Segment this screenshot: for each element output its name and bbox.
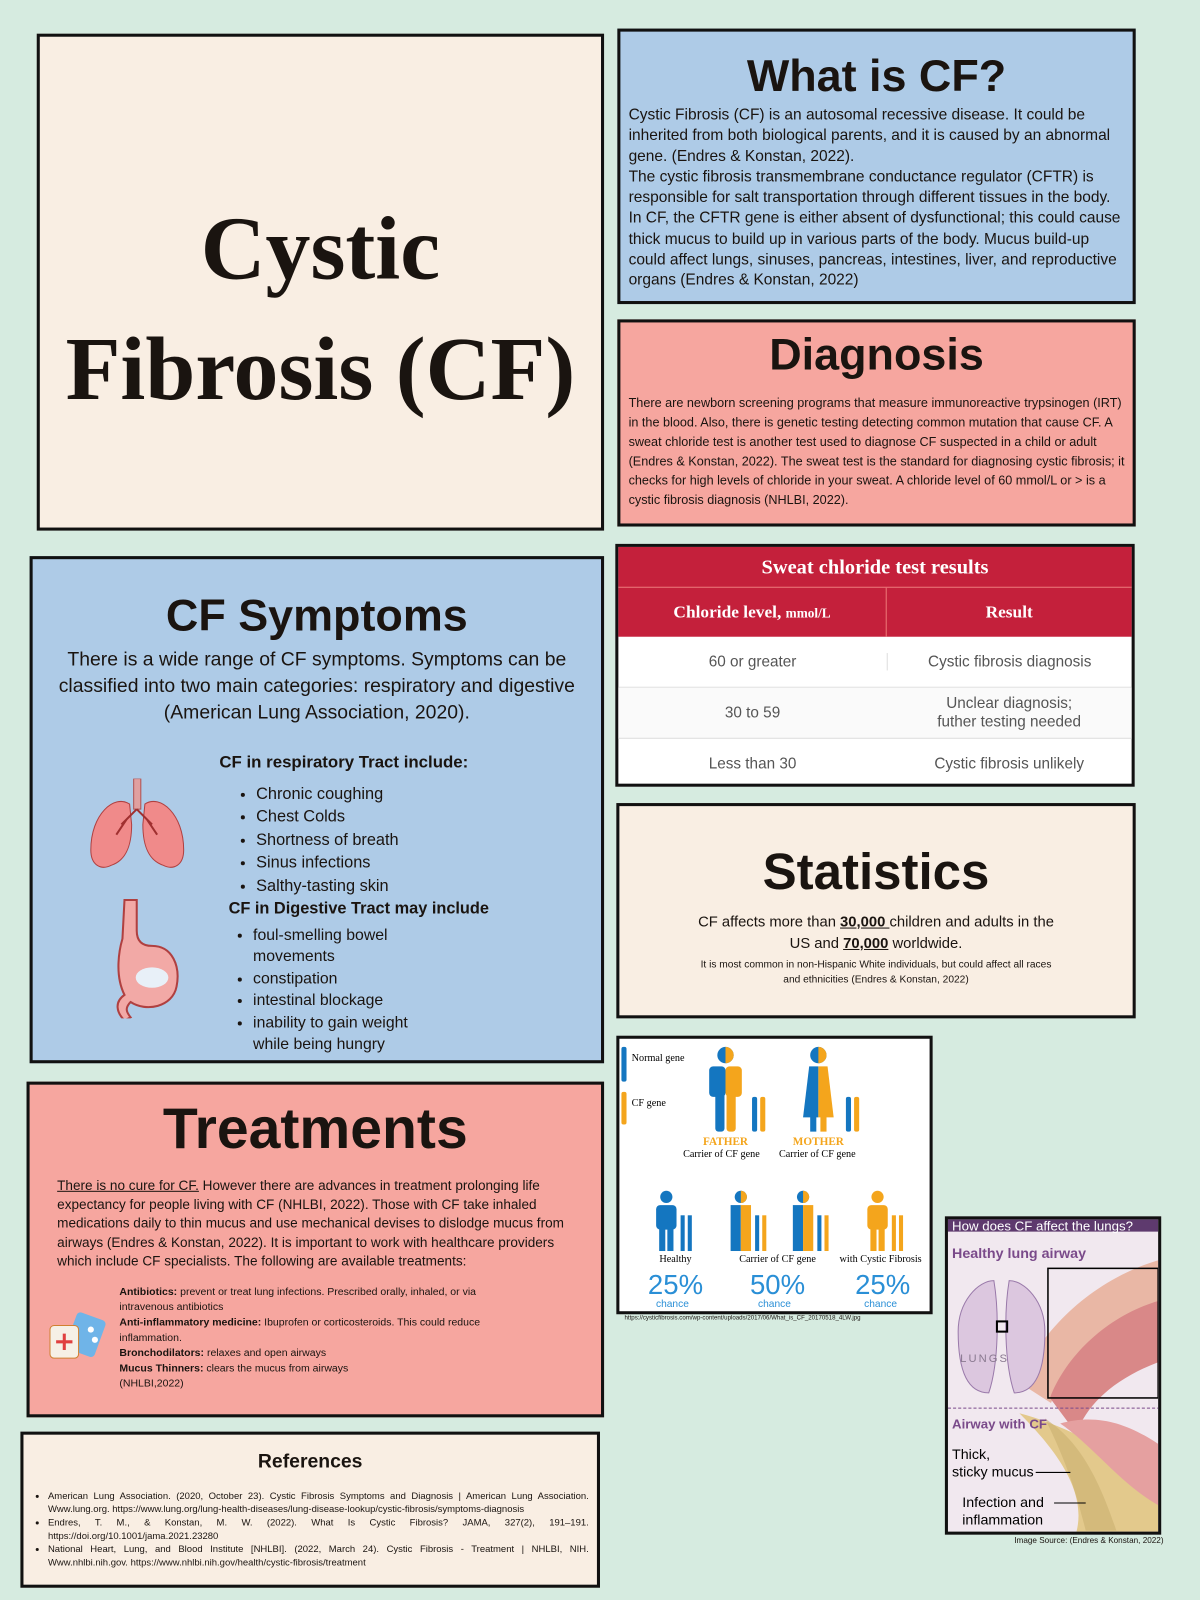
father [709, 1047, 765, 1132]
panel: diagnosis [617, 319, 1136, 527]
table rows: Unclear diagnosis; [946, 694, 1072, 712]
image: lungs airway: LUNGS [960, 1353, 1009, 1365]
list: treatment types [119, 1287, 480, 1390]
chart: genetics inheritance [616, 1036, 933, 1314]
text: definition [628, 106, 1120, 289]
title: Fibrosis (CF) [66, 320, 575, 419]
list: treatment types: Bronchodilators: relaxes and open airways [119, 1348, 326, 1359]
table rows [618, 653, 1132, 772]
table header [618, 588, 1132, 637]
heading: What is CF: What is CF? [747, 51, 1006, 101]
heading: References: References [258, 1451, 362, 1472]
image: lungs airway: Thick, [952, 1447, 990, 1463]
text: statistics [698, 914, 1054, 952]
list: respiratory: Shortness of breath [256, 831, 399, 848]
image: lungs airway: sticky mucus [952, 1465, 1034, 1481]
chart: genetics inheritance: FATHER [703, 1136, 749, 1148]
chart: genetics inheritance: Carrier of CF gene [739, 1254, 816, 1265]
image: lungs airway: Healthy lung airway [952, 1246, 1086, 1262]
chart: genetics inheritance: chance [864, 1299, 897, 1310]
chart: genetics inheritance: Normal gene [632, 1053, 685, 1064]
list: respiratory: Chronic coughing [256, 785, 383, 803]
list: digestive: constipation [253, 970, 337, 987]
list: references [36, 1491, 589, 1568]
list: references: American Lung Association. (2020, October 23). Cystic Fibrosis Symptoms and Diagnosis | American Lung Association. Www.lung.org. https://www.lung.org/lung-health-diseases/lung-disease-lookup/cystic-fibrosis/symptoms-diagnosis [48, 1491, 589, 1514]
caption: genetics source: https://cysticfibrosis.com/wp-content/uploads/2017/06/What_is_CF_20170518_4LW.jpg [624, 1315, 861, 1321]
heading: Statistics: Statistics [763, 843, 989, 900]
list: treatment types: Mucus Thinners: clears the mucus from airways [119, 1363, 348, 1374]
table rows: Less than 30 [709, 755, 796, 772]
chart: genetics inheritance: Carrier of CF gene [779, 1149, 856, 1160]
list: digestive: CF in Digestive Tract may include [229, 900, 489, 917]
list: digestive [229, 900, 489, 1053]
chart: genetics inheritance: 25% [648, 1269, 703, 1300]
image: lungs airway [945, 1216, 1161, 1535]
text: definition: The cystic fibrosis transmembrane conductance regulator (CFTR) is responsible for salt transportation through different tissues in the body. In CF, the CFTR gene is either absent of dysfunctional; this could cause thick mucus to build up in various parts of the body. Mucus build-up could affect lungs, sinuses, pancreas, intestines, liver, and reproductive organs (Endres & Konstan, 2022) [629, 168, 1120, 289]
list: digestive: inability to gain weight [253, 1014, 408, 1031]
panel: references [20, 1432, 600, 1588]
image: lungs airway: inflammation [962, 1512, 1043, 1528]
chart: genetics inheritance: CF gene [632, 1098, 666, 1109]
list: references: Endres, T. M., & Konstan, M. W. (2022). What Is Cystic Fibrosis? JAMA, 327(2), 191–191. https://doi.org/10.1001/jama.2021.23280 [48, 1517, 589, 1541]
title [66, 200, 575, 419]
chart: genetics inheritance: MOTHER [793, 1136, 845, 1148]
table rows: Cystic fibrosis unlikely [934, 755, 1084, 772]
text: statistics: US and 70,000 worldwide. [790, 936, 962, 952]
title: Cystic [201, 200, 440, 299]
text: definition: Cystic Fibrosis (CF) is an autosomal recessive disease. It could be inherited from both biological parents, and it is caused by an abnormal gene. (Endres & Konstan, 2022). [629, 106, 1110, 165]
chart: genetics inheritance: Carrier of CF gene [683, 1149, 760, 1160]
image: lungs airway: Infection and [962, 1495, 1044, 1511]
panel: what is CF [617, 29, 1136, 304]
heading: Treatments: Treatments [163, 1096, 468, 1160]
table header: Result [986, 602, 1033, 621]
list: respiratory: CF in respiratory Tract include: [219, 753, 468, 771]
icon: medicine [50, 1312, 106, 1359]
mother [803, 1047, 859, 1132]
text: statistics: CF affects more than 30,000 children and adults in the [698, 914, 1054, 931]
list: treatment types: Antibiotics: prevent or treat lung infections. Prescribed orally, inhaled, or via intravenous antibiotics [119, 1287, 476, 1313]
icon: lungs [90, 778, 184, 868]
panel: statistics: and ethnicities (Endres & Konstan, 2022) [783, 974, 969, 986]
list: digestive: foul-smelling bowel [253, 926, 388, 943]
table rows: futher testing needed [937, 713, 1081, 730]
list: references: National Heart, Lung, and Blood Institute [NHLBI]. (2022, March 24). Cystic Fibrosis - Treatment | NHLBI, NIH. Www.nhlbi.nih.gov. https://www.nhlbi.nih.gov/health/cystic-fibrosis/treatment [48, 1544, 589, 1567]
table rows: 30 to 59 [725, 704, 780, 721]
list: respiratory [219, 753, 468, 894]
icon: stomach [116, 899, 179, 1018]
text: diagnosis: There are newborn screening programs that measure immunoreactive trypsinogen (IRT) in the blood. Also, there is genetic testing detecting common mutation that cause CF. A sweat chloride test is another test used to diagnose CF suspected in a child or adult (Endres & Konstan, 2022). The sweat test is the standard for diagnosing cystic fibrosis; it checks for high levels of chloride in your sweat. A chloride level of 60 mmol/L or > is a cystic fibrosis diagnosis (NHLBI, 2022). [629, 396, 1124, 507]
chart: genetics inheritance: chance [758, 1299, 791, 1310]
list: treatment types: (NHLBI,2022) [119, 1379, 184, 1390]
children [656, 1191, 692, 1251]
heading: Diagnosis: Diagnosis [769, 330, 984, 380]
panel: statistics: It is most common in non-Hispanic White individuals, but could affect all races [701, 959, 1051, 970]
chart: genetics inheritance: Healthy [659, 1254, 693, 1265]
list: respiratory: Salthy-tasting skin [256, 877, 389, 894]
caption: lung image source: Image Source: (Endres & Konstan, 2022) [1014, 1536, 1164, 1545]
table title [618, 547, 1132, 588]
text: symptoms intro: There is a wide range of CF symptoms. Symptoms can be classified into two main categories: respiratory and digestive (American Lung Association, 2020). [59, 649, 575, 723]
chart: genetics inheritance: 25% [855, 1269, 910, 1300]
list: respiratory: Chest Colds [256, 808, 345, 826]
list: digestive: movements [253, 948, 335, 965]
chart: genetics inheritance: with Cystic Fibrosis [840, 1254, 922, 1265]
chart: genetics inheritance: 50% [750, 1269, 805, 1300]
table title: Sweat chloride test results [762, 556, 988, 579]
panel: treatments [27, 1082, 604, 1417]
list: respiratory: Sinus infections [256, 854, 370, 871]
table header: Chloride level, mmol/L [673, 602, 831, 621]
list: digestive: while being hungry [253, 1036, 385, 1053]
chart: genetics inheritance: chance [656, 1299, 689, 1310]
panel: symptoms [30, 556, 604, 1063]
table rows: 60 or greater [709, 653, 796, 670]
heading: CF Symptoms: CF Symptoms [166, 591, 468, 641]
panel: statistics [616, 803, 1136, 1018]
list: digestive: intestinal blockage [253, 992, 383, 1009]
text: treatments intro: There is no cure for CF. However there are advances in treatment prolonging life expectancy for people living with CF (NHLBI, 2022). Those with CF take inhaled medications daily to thin mucus and use mechanical devises to dislodge mucus from airways (Endres & Konstan, 2022). It is important to work with healthcare providers which include CF specialists. The following are available treatments: [57, 1178, 564, 1268]
list: treatment types: Anti-inflammatory medicine: Ibuprofen or corticosteroids. This could reduce inflammation. [119, 1317, 480, 1344]
panel: title [37, 34, 604, 531]
table: sweat chloride [615, 544, 1135, 787]
table rows: Cystic fibrosis diagnosis [928, 653, 1091, 670]
image: lungs airway: Airway with CF [952, 1417, 1047, 1432]
